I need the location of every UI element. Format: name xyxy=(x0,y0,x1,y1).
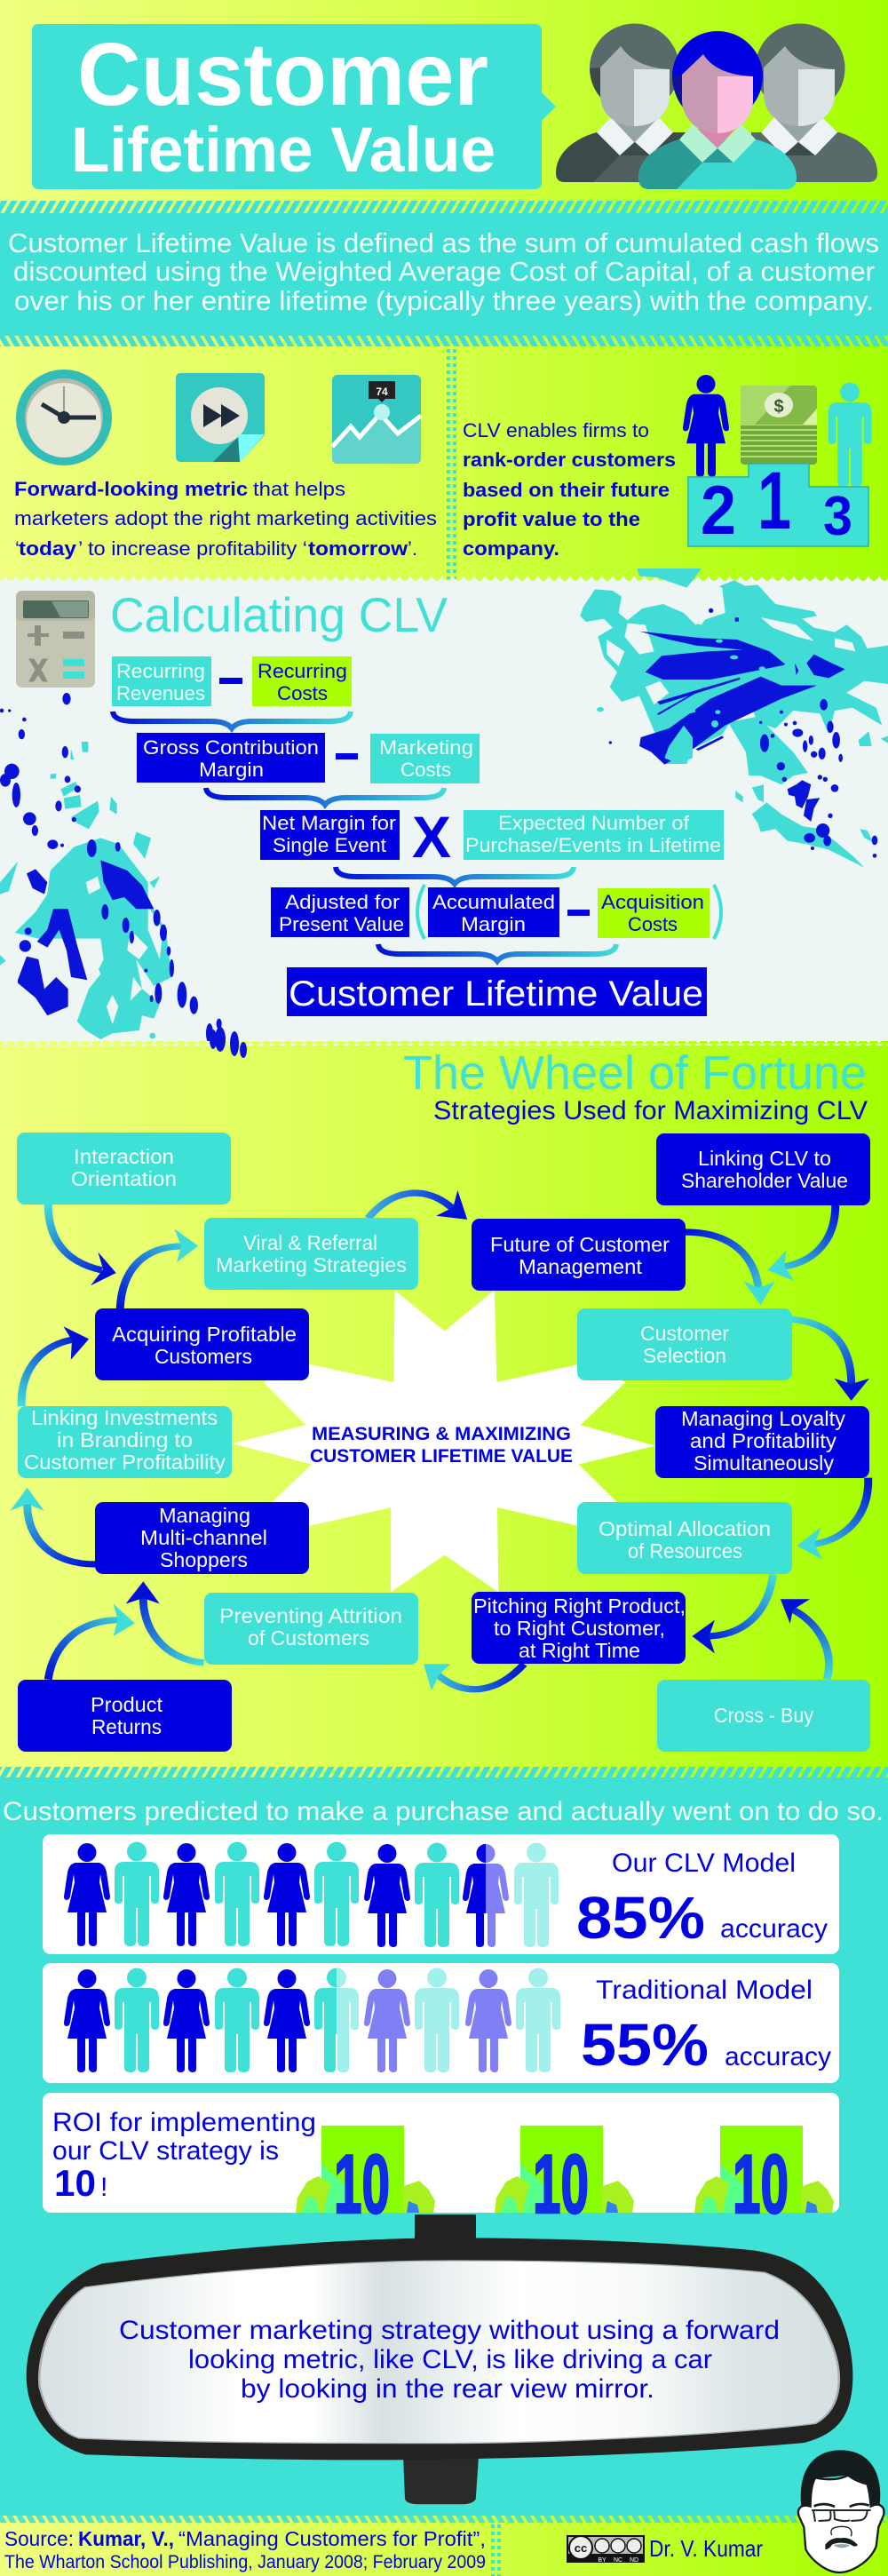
title banner: Customer xyxy=(77,25,488,124)
formula box: expected number: Purchase/Events in Lifetime xyxy=(465,834,721,856)
card: ROI xyxy=(43,2093,839,2230)
strategy: preventing attrition: Preventing Attrition xyxy=(219,1604,402,1627)
icon: creative commons badge: ND xyxy=(630,2557,638,2564)
text: forward-looking metric: that helps xyxy=(253,478,345,500)
definition band: over his or her entire lifetime (typically three years) with the company. xyxy=(14,285,874,316)
strategy: preventing attrition: of Customers xyxy=(248,1626,369,1650)
formula box: gross contribution margin xyxy=(137,733,325,783)
icon: calculator xyxy=(16,591,95,688)
strategy: cross-buy xyxy=(657,1680,870,1752)
card: ROI: 10 xyxy=(54,2162,96,2204)
strategy: acquiring profitable customers: Customers xyxy=(155,1345,252,1368)
text: rank-order customers: rank-order customers xyxy=(463,449,676,471)
icon: ten sign xyxy=(296,2126,435,2230)
strategy: linking investments in branding: Linking Investments xyxy=(31,1406,218,1429)
subheading: Strategies Used for Maximizing CLV xyxy=(433,1096,868,1125)
strategy: product returns xyxy=(18,1680,232,1752)
strategy: pitching right product: Pitching Right Product, xyxy=(473,1594,686,1618)
formula box: accumulated margin: Accumulated xyxy=(432,891,555,913)
heading: the wheel of fortune: The Wheel of Fortune xyxy=(403,1046,867,1100)
title banner xyxy=(32,24,556,189)
strategy: managing loyalty and profitability: Managing Loyalty xyxy=(681,1407,845,1430)
text: forward-looking metric: ’. xyxy=(408,537,417,560)
dotted divider xyxy=(448,349,455,579)
icon: podium with customers and money xyxy=(683,375,872,549)
strategy: product returns: Returns xyxy=(91,1715,162,1738)
icon: portrait of Dr. Kumar xyxy=(798,2450,884,2572)
minus sign xyxy=(567,910,590,916)
icon: podium with customers and money: 1 xyxy=(757,456,791,546)
card: traditional model: Traditional Model xyxy=(596,1976,813,2005)
strategy: viral and referral: Viral & Referral xyxy=(243,1231,377,1254)
strategy: managing multi-channel shoppers: Managing xyxy=(159,1504,250,1527)
right customer xyxy=(751,23,877,182)
brace xyxy=(378,944,616,961)
text: Dr. V. Kumar: Dr. V. Kumar xyxy=(649,2535,763,2562)
formula box: recurring costs: Costs xyxy=(277,682,328,704)
strategy: managing multi-channel shoppers xyxy=(95,1502,309,1574)
strategy: managing loyalty and profitability: Simultaneously xyxy=(694,1451,835,1475)
text: rank-order customers: based on their future xyxy=(463,479,670,501)
strategy: preventing attrition xyxy=(204,1593,418,1665)
strategy: interaction orientation xyxy=(17,1133,231,1205)
strategy: linking CLV to shareholder value: Shareholder Value xyxy=(681,1169,848,1192)
card: our CLV model: accuracy xyxy=(720,1914,828,1944)
icon: ten sign xyxy=(495,2126,634,2230)
strategy: pitching right product: at Right Time xyxy=(519,1639,640,1662)
strategy: optimal allocation of resources: Optimal Allocation xyxy=(599,1517,771,1540)
text: source: Kumar, V., xyxy=(78,2527,174,2550)
brace xyxy=(113,712,351,728)
strategy: linking investments in branding: in Branding to xyxy=(57,1428,193,1451)
strategy: viral and referral: Marketing Strategies xyxy=(216,1253,407,1276)
icon: creative commons badge: NC xyxy=(614,2557,622,2564)
card: our CLV model: Our CLV Model xyxy=(612,1849,796,1878)
formula box: expected number: Expected Number of xyxy=(498,812,690,834)
title banner: Lifetime Value xyxy=(71,115,496,186)
strategy: future of customer management: Management xyxy=(519,1255,643,1278)
card: ROI: our CLV strategy is xyxy=(52,2136,279,2166)
strategy: optimal allocation of resources: of Resources xyxy=(628,1539,742,1562)
text: forward-looking metric: marketers adopt the right marketing activities xyxy=(14,507,437,529)
strategy: product returns: Product xyxy=(91,1693,163,1716)
dotted divider xyxy=(493,2524,499,2576)
strategy: customer selection: Customer xyxy=(640,1322,729,1345)
strategy: managing loyalty and profitability xyxy=(655,1406,869,1478)
formula box: gross contribution margin: Gross Contribution xyxy=(143,736,319,759)
strategy: viral and referral xyxy=(204,1218,418,1290)
text: source: Source: xyxy=(4,2527,74,2550)
paint splatter: lower left xyxy=(0,693,222,1044)
icon: line chart with tag xyxy=(332,375,421,464)
definition band: Customer Lifetime Value is defined as the sum of cumulated cash flows xyxy=(8,227,879,258)
card: ROI: ! xyxy=(100,2173,107,2202)
panel: calculating CLV xyxy=(0,568,888,1044)
card: traditional model xyxy=(43,1963,839,2083)
splatter remnant xyxy=(210,1027,247,1058)
text: forward-looking metric: today xyxy=(19,537,77,560)
formula box: accumulated margin: Margin xyxy=(461,913,526,935)
formula box: acquisition costs: Costs xyxy=(628,913,678,935)
icon: podium with customers and money: 2 xyxy=(701,471,736,549)
heading: customers predicted: Customers predicted to make a purchase and actually went on to do so. xyxy=(3,1797,884,1826)
formula box: net margin: Net Margin for xyxy=(262,812,396,834)
formula box: acquisition costs: Acquisition xyxy=(601,891,704,913)
strategy: linking CLV to shareholder value xyxy=(656,1133,870,1205)
formula box: adjusted for present value: Present Value xyxy=(279,913,404,935)
formula box: marketing costs xyxy=(370,734,480,783)
strategy: interaction orientation: Orientation xyxy=(71,1167,177,1190)
pictogram row 85 percent xyxy=(64,1842,559,1947)
brace xyxy=(206,788,444,805)
central star xyxy=(232,1290,655,1592)
text: rank-order customers: company. xyxy=(463,537,559,560)
card: traditional model: accuracy xyxy=(725,2042,831,2071)
icon: creative commons badge: BY xyxy=(598,2557,607,2564)
strategy: linking investments in branding: Customer Profitability xyxy=(24,1451,226,1474)
strategy: future of customer management: Future of Customer xyxy=(490,1233,670,1256)
icon: ten sign xyxy=(694,2126,834,2230)
text: forward-looking metric xyxy=(14,478,437,560)
formula box: recurring costs xyxy=(252,656,352,706)
text: source: “Managing Customers for Profit”, xyxy=(178,2527,486,2550)
formula box: marketing costs: Marketing xyxy=(379,736,473,759)
strategy: cross-buy: Cross - Buy xyxy=(714,1704,813,1727)
strategy: acquiring profitable customers xyxy=(95,1308,309,1380)
text: source: The Wharton School Publishing, January 2008; February 2009 xyxy=(4,2552,486,2572)
strategy: pitching right product: to Right Customer, xyxy=(494,1617,665,1640)
multiply sign: X xyxy=(412,804,451,870)
icon: creative commons badge xyxy=(567,2535,645,2564)
right parenthesis xyxy=(714,885,721,939)
icon: rear view mirror: Customer marketing strategy without using a forward xyxy=(119,2316,780,2345)
icon: podium with customers and money: 3 xyxy=(823,486,852,547)
center customer xyxy=(638,31,797,189)
minus sign xyxy=(336,753,358,759)
panel: wheel of fortune xyxy=(0,1027,888,1754)
strategy: pitching right product xyxy=(472,1592,686,1664)
paint splatter: top right xyxy=(580,568,888,868)
icon: podium with customers and money: $ xyxy=(773,397,784,417)
formula box: recurring revenues: Recurring xyxy=(116,660,205,682)
panel: accuracy and ROI xyxy=(0,1767,888,2514)
icon: rear view mirror: looking metric, like CLV, is like driving a car xyxy=(188,2345,712,2374)
icon: fast forward file xyxy=(176,373,265,462)
central star: MEASURING & MAXIMIZING xyxy=(312,1424,571,1444)
text: forward-looking metric: ’ to increase profitability ‘ xyxy=(78,537,307,560)
formula box: adjusted for present value: Adjusted for xyxy=(285,891,400,913)
strategy: managing multi-channel shoppers: Multi-channel xyxy=(140,1526,267,1549)
icon: line chart with tag: 74 xyxy=(376,386,388,398)
definition band xyxy=(0,201,888,346)
card: our CLV model xyxy=(43,1834,839,1954)
icon: rear view mirror xyxy=(27,2214,852,2504)
formula box: adjusted for present value xyxy=(271,887,409,937)
strategy: managing multi-channel shoppers: Shoppers xyxy=(160,1548,248,1571)
card: our CLV model: 85% xyxy=(576,1885,705,1952)
pictogram row 55 percent xyxy=(64,1968,560,2072)
formula box: accumulated margin xyxy=(428,887,559,937)
text: forward-looking metric: tomorrow xyxy=(308,537,408,560)
result box: customer lifetime value: Customer Lifetime Value xyxy=(289,974,703,1014)
formula box: expected number xyxy=(464,810,724,860)
icon: creative commons badge: cc xyxy=(575,2541,587,2555)
text: rank-order customers xyxy=(463,419,676,560)
formula box: marketing costs: Costs xyxy=(400,759,451,781)
central star: CUSTOMER LIFETIME VALUE xyxy=(310,1446,573,1467)
left parenthesis xyxy=(417,885,424,939)
strategy: customer selection: Selection xyxy=(643,1344,726,1367)
formula box: recurring revenues xyxy=(112,656,211,706)
formula box: net margin: Single Event xyxy=(273,834,386,856)
text: rank-order customers: CLV enables firms to xyxy=(463,419,649,441)
formula box: acquisition costs xyxy=(598,888,710,938)
text: rank-order customers: profit value to the xyxy=(463,508,640,530)
brace xyxy=(336,867,574,884)
arrows xyxy=(10,1190,869,1690)
card: traditional model: 55% xyxy=(581,2012,709,2079)
icon: three customers xyxy=(556,23,877,189)
left customer xyxy=(556,23,693,182)
heading: Calculating CLV: Calculating CLV xyxy=(110,587,448,642)
card: ROI: ROI for implementing xyxy=(52,2108,316,2137)
strategy: customer selection xyxy=(577,1308,792,1380)
formula box: gross contribution margin: Margin xyxy=(199,759,264,781)
strategy: optimal allocation of resources xyxy=(577,1502,792,1574)
icon: clock xyxy=(16,370,112,465)
minus sign xyxy=(219,678,242,684)
icon: rear view mirror: by looking in the rear view mirror. xyxy=(241,2374,654,2404)
panel: footer xyxy=(0,2450,888,2576)
strategy: linking investments in branding xyxy=(18,1406,232,1478)
formula box: net margin xyxy=(260,810,400,860)
text: forward-looking metric: ‘ xyxy=(15,537,20,560)
formula box: recurring costs: Recurring xyxy=(258,660,347,682)
strategy: interaction orientation: Interaction xyxy=(74,1145,174,1168)
text: source xyxy=(4,2527,486,2572)
strategy: managing loyalty and profitability: and Profitability xyxy=(690,1429,837,1452)
formula box: recurring revenues: Revenues xyxy=(116,682,205,704)
text: forward-looking metric: Forward-looking metric xyxy=(14,478,248,500)
strategy: linking CLV to shareholder value: Linking CLV to xyxy=(698,1147,831,1170)
strategy: acquiring profitable customers: Acquiring Profitable xyxy=(112,1323,297,1346)
strategy: future of customer management xyxy=(472,1219,686,1291)
definition band: discounted using the Weighted Average Cost of Capital, of a customer xyxy=(13,256,875,287)
